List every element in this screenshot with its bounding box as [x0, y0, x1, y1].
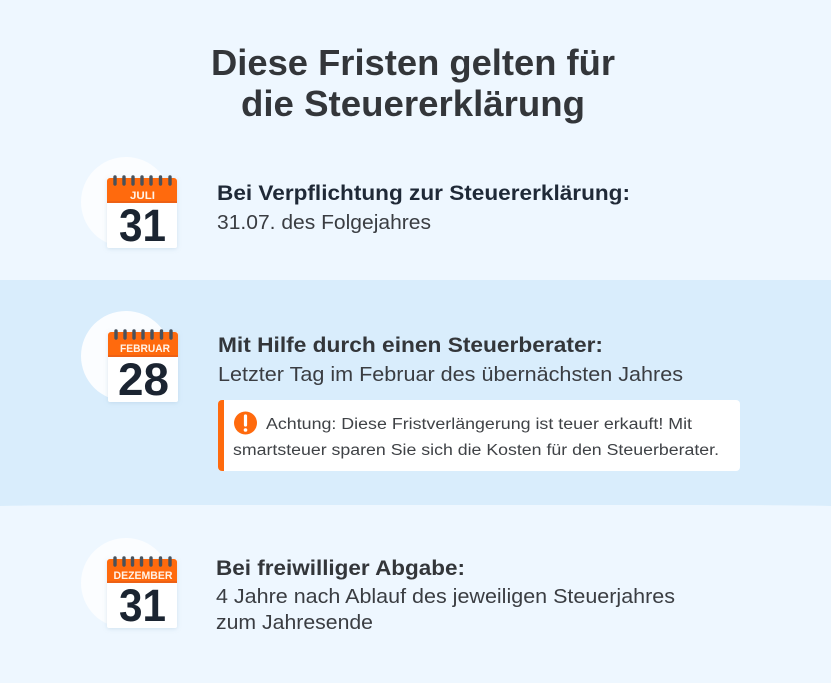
icon: calendar Juli: [81, 157, 177, 251]
text block: Letzter Tag im Februar des übernächsten Jahres: [218, 363, 683, 386]
icon: calendar Februar: FEBRUAR: [120, 343, 170, 355]
heading: Mit Hilfe durch einen Steuerberater:: [218, 333, 603, 357]
panel: freiwillige Abgabe: [81, 538, 675, 634]
text block: 4 Jahre nach Ablauf des jeweiligen Steuerjahres: [216, 585, 675, 608]
middle band: [0, 280, 831, 506]
icon: calendar Juli: JULI: [130, 190, 155, 202]
heading: Bei freiwilliger Abgabe:: [216, 556, 465, 580]
icon: warning: [234, 412, 257, 434]
title: die Steuererklärung: [241, 83, 585, 124]
callout: [218, 400, 740, 471]
icon: calendar Dezember: DEZEMBER: [114, 570, 173, 582]
title: [211, 42, 615, 124]
callout text: smartsteuer sparen Sie sich die Kosten für den Steuerberater.: [233, 442, 719, 459]
icon: calendar Juli: 31: [119, 200, 166, 251]
icon: calendar Dezember: [81, 538, 177, 631]
callout text: [233, 416, 719, 459]
icon: calendar Februar: [81, 311, 178, 405]
panel: Verpflichtung: [81, 157, 630, 251]
text block: 31.07. des Folgejahres: [217, 211, 431, 234]
icon: calendar Dezember: 31: [119, 580, 166, 631]
text block: [216, 585, 675, 634]
title: Diese Fristen gelten für: [211, 42, 615, 83]
text block: zum Jahresende: [216, 611, 373, 634]
icon: calendar Februar: 28: [118, 354, 169, 405]
panel: Steuerberater: [81, 311, 740, 471]
callout text: Achtung: Diese Fristverlängerung ist teuer erkauft! Mit: [266, 416, 693, 433]
heading: Bei Verpflichtung zur Steuererklärung:: [217, 181, 630, 205]
